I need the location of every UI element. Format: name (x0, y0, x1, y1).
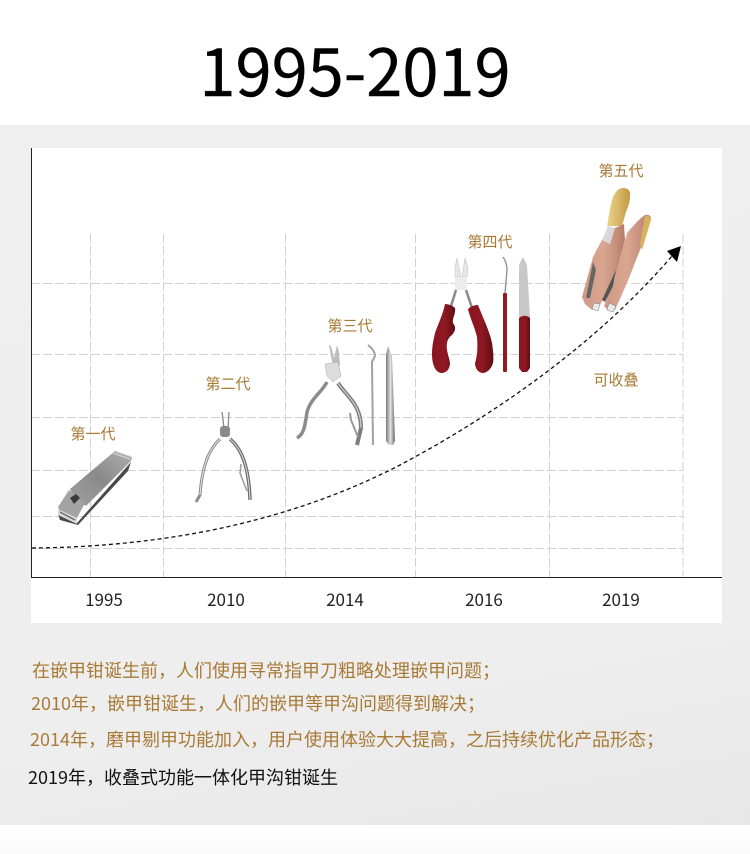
icon: third generation nippers and tools (297, 345, 395, 445)
generation labels: 第二代 (205, 373, 251, 394)
panel: bottom white strip (0, 825, 750, 854)
generation labels (70, 160, 644, 444)
text line 3: 2014年，磨甲剔甲功能加入，用户使用体验大大提高，之后持续优化产品形态； (30, 726, 664, 752)
year labels: 2010 (207, 586, 245, 611)
generation labels: 可收叠 (593, 369, 639, 390)
axes (32, 148, 722, 578)
icon: fourth generation red nippers and tools (432, 257, 530, 373)
generation labels: 第一代 (70, 423, 116, 444)
generation labels: 第五代 (598, 160, 644, 181)
growth curve arrow (32, 246, 681, 548)
text line 4: 2019年，收叠式功能一体化甲沟钳诞生 (28, 764, 338, 790)
year labels (85, 586, 640, 611)
generation labels: 第四代 (467, 231, 513, 252)
year labels: 2019 (602, 586, 640, 611)
year labels: 1995 (85, 586, 123, 611)
icon: second generation nippers (196, 412, 250, 502)
icon: fifth generation folding rose-gold tool (582, 188, 651, 312)
title: 1995-2019 (199, 21, 511, 115)
text line 2: 2010年，嵌甲钳诞生，人们的嵌甲等甲沟问题得到解决； (31, 690, 485, 716)
generation labels: 第三代 (327, 315, 373, 336)
text block: history (28, 657, 664, 790)
year labels: 2014 (326, 586, 364, 611)
text line 1: 在嵌甲钳诞生前，人们使用寻常指甲刀粗略处理嵌甲问题； (32, 657, 500, 683)
year labels: 2016 (465, 586, 503, 611)
icon: nail clipper (58, 451, 132, 525)
